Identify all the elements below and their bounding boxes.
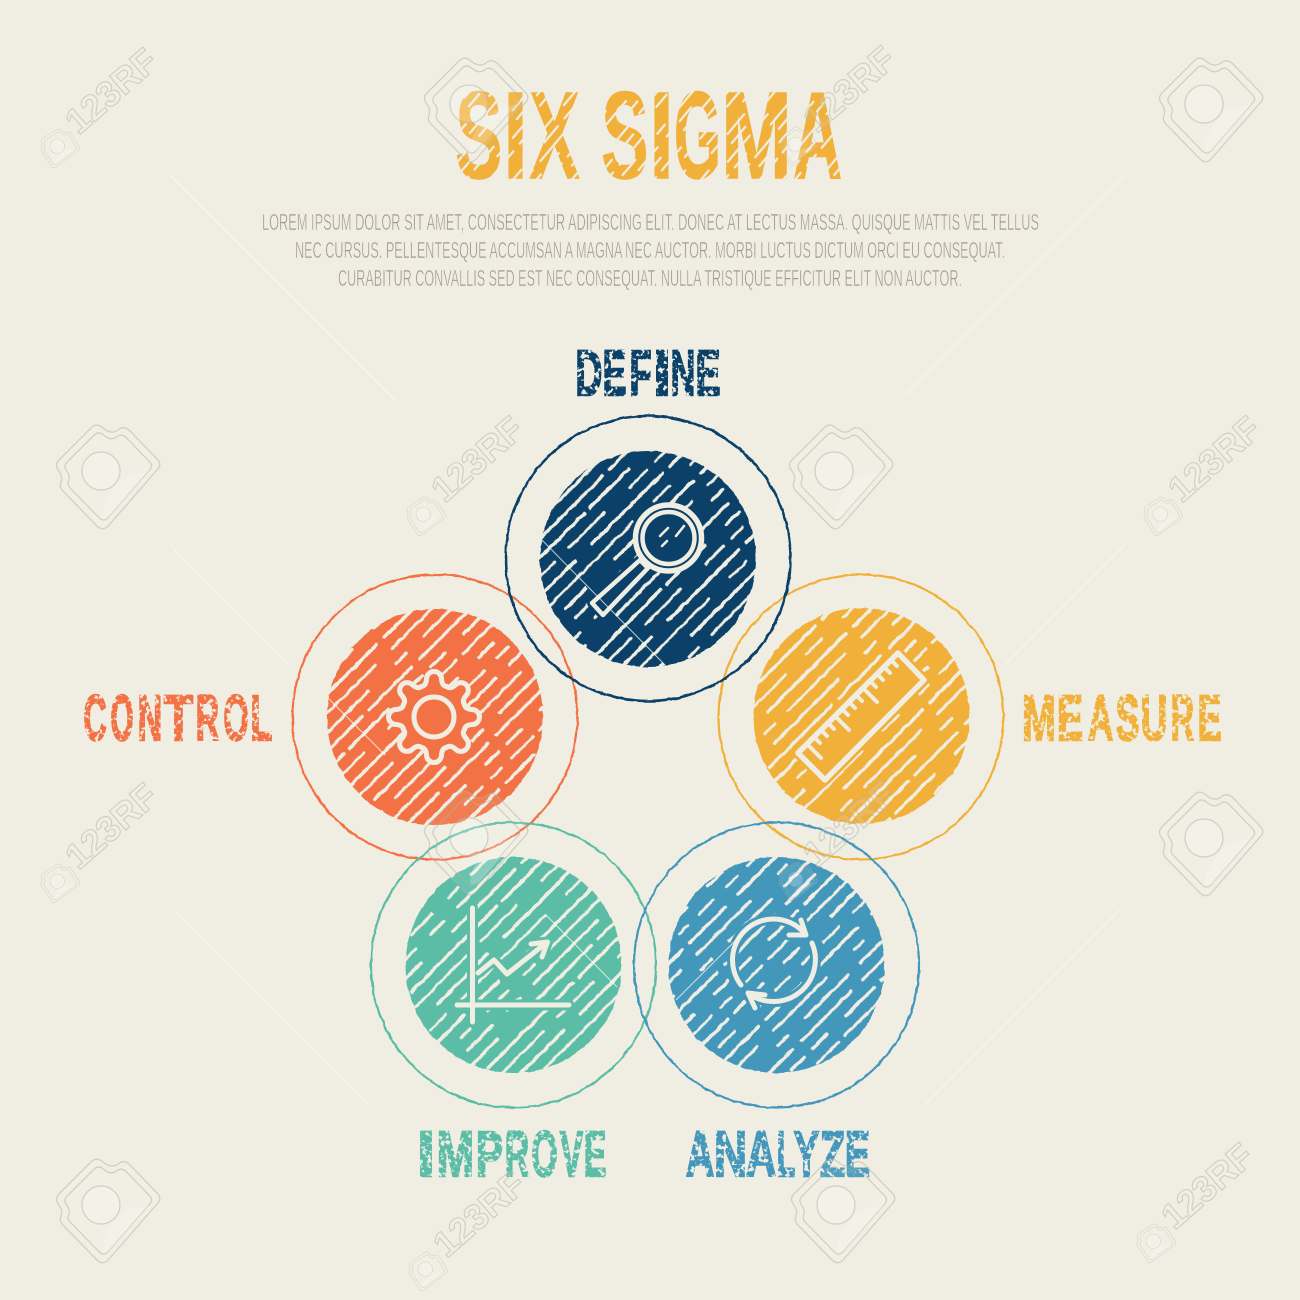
panel: control [84,574,578,860]
improve label: E [584,1118,606,1190]
panel: define [506,337,790,701]
control label: C [84,682,106,754]
improve label: O [531,1118,558,1190]
measure label: E [1057,682,1083,754]
measure label: R [1171,682,1194,754]
define label: D [576,337,602,409]
icon: gear [388,672,480,762]
analyze label: E [845,1118,870,1190]
icon: growth chart [457,908,569,1022]
define label: E [696,337,720,409]
measure disc [754,608,970,824]
control ring [292,574,578,860]
analyze label: Z [820,1118,845,1190]
icon: magnifier [592,505,702,615]
define disc [540,451,756,667]
improve label: P [476,1118,503,1190]
control disc [327,609,543,825]
title: I [503,68,528,205]
analyze label: N [714,1118,747,1190]
measure label: U [1141,682,1167,754]
define label: N [671,337,695,409]
title: A [793,68,842,205]
improve ring [371,822,656,1108]
define label: E [603,337,626,409]
improve disc [406,857,622,1073]
control label: O [224,682,248,754]
measure ring [718,574,1004,860]
control label: T [164,682,193,754]
title: S [601,68,648,205]
control label: O [110,682,134,754]
control label: N [138,682,162,754]
improve label: V [560,1118,583,1190]
measure label: A [1088,682,1113,754]
define ring [506,416,790,701]
panel: measure [718,574,1221,860]
panel: analyze [634,822,919,1190]
analyze label: A [686,1118,714,1190]
define label: I [653,337,671,409]
analyze label: L [777,1118,795,1190]
title: S [455,68,502,205]
title: I [649,68,674,205]
title: G [674,68,721,205]
analyze disc [668,857,884,1073]
measure label: M [1022,682,1056,754]
title: M [721,68,792,205]
improve label: I [417,1118,435,1190]
control label: R [196,682,219,754]
icon: ruler [798,653,924,780]
improve label: M [437,1118,474,1190]
analyze ring [634,822,919,1108]
control label: L [250,682,272,754]
define label: F [630,337,652,409]
measure label: E [1198,682,1221,754]
measure label: S [1116,682,1139,754]
panel: improve [371,822,656,1190]
icon: cycle arrows [732,919,815,1008]
analyze label: Y [794,1118,819,1190]
title: X [530,68,580,205]
improve label: R [505,1118,529,1190]
analyze label: A [746,1118,776,1190]
intro text block [262,209,1039,291]
